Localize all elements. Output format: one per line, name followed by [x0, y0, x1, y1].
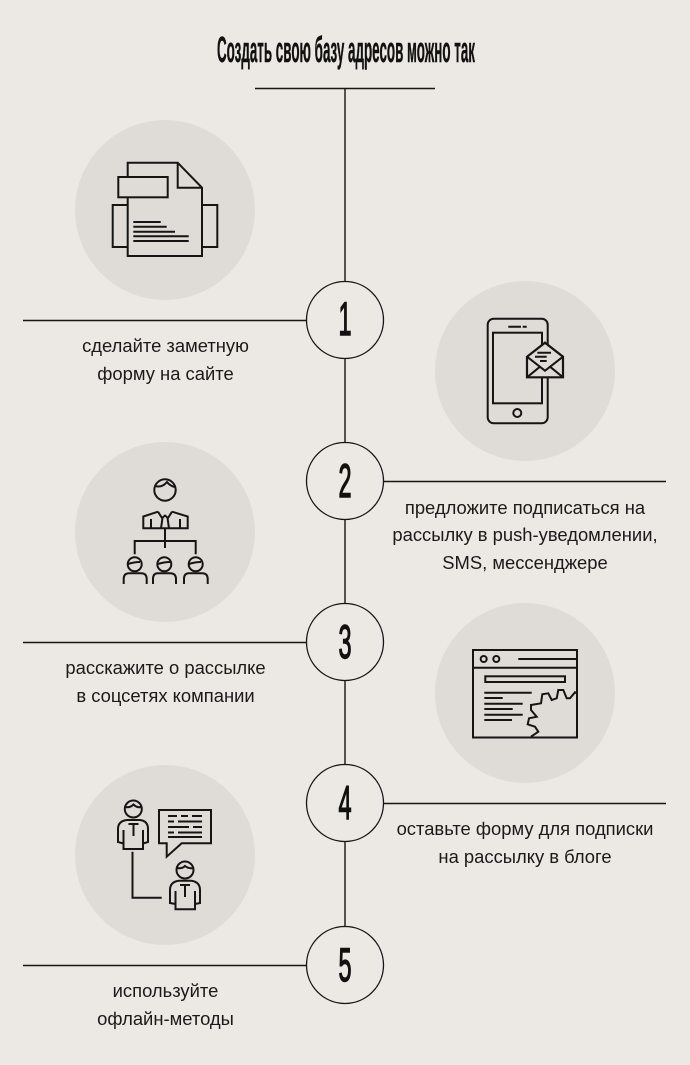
text: step 3 [65, 657, 266, 706]
text: step 1: сделайте заметную [82, 335, 249, 356]
text: step 4: на рассылку в блоге [438, 846, 612, 867]
step 3 number: 3 [338, 615, 352, 668]
text: step 4 [397, 818, 653, 867]
icon: document form [75, 120, 255, 300]
text: step 1: форму на сайте [97, 363, 234, 384]
step 2 number [306, 442, 384, 520]
icon: browser with gear [435, 603, 615, 783]
text: step 4: оставьте форму для подписки [397, 818, 653, 839]
step 1 number [306, 282, 384, 358]
text: step 2: SMS, мессенджере [442, 552, 608, 573]
step 2 number: 2 [338, 454, 352, 507]
text: step 3: в соцсетях компании [76, 685, 255, 706]
step 4 number [306, 764, 384, 842]
text: step 5 [97, 980, 234, 1029]
text: step 5: офлайн-методы [97, 1008, 234, 1029]
icon: phone with envelope [435, 281, 615, 461]
icon: org chart [75, 442, 255, 622]
text: step 5: используйте [113, 980, 218, 1001]
text: step 2: рассылку в push-уведомлении, [392, 524, 658, 545]
icon: two people talking [75, 765, 255, 945]
text: step 1 [82, 335, 249, 384]
timeline [23, 88, 666, 966]
text: step 3: расскажите о рассылке [65, 657, 266, 678]
step 4 number: 4 [338, 776, 352, 829]
step 3 number [306, 604, 384, 680]
step 5 number [306, 926, 384, 1004]
step 1 number: 1 [338, 292, 352, 345]
text: step 2: предложите подписаться на [405, 497, 646, 518]
step 5 number: 5 [338, 938, 352, 991]
text: step 2 [392, 497, 658, 573]
